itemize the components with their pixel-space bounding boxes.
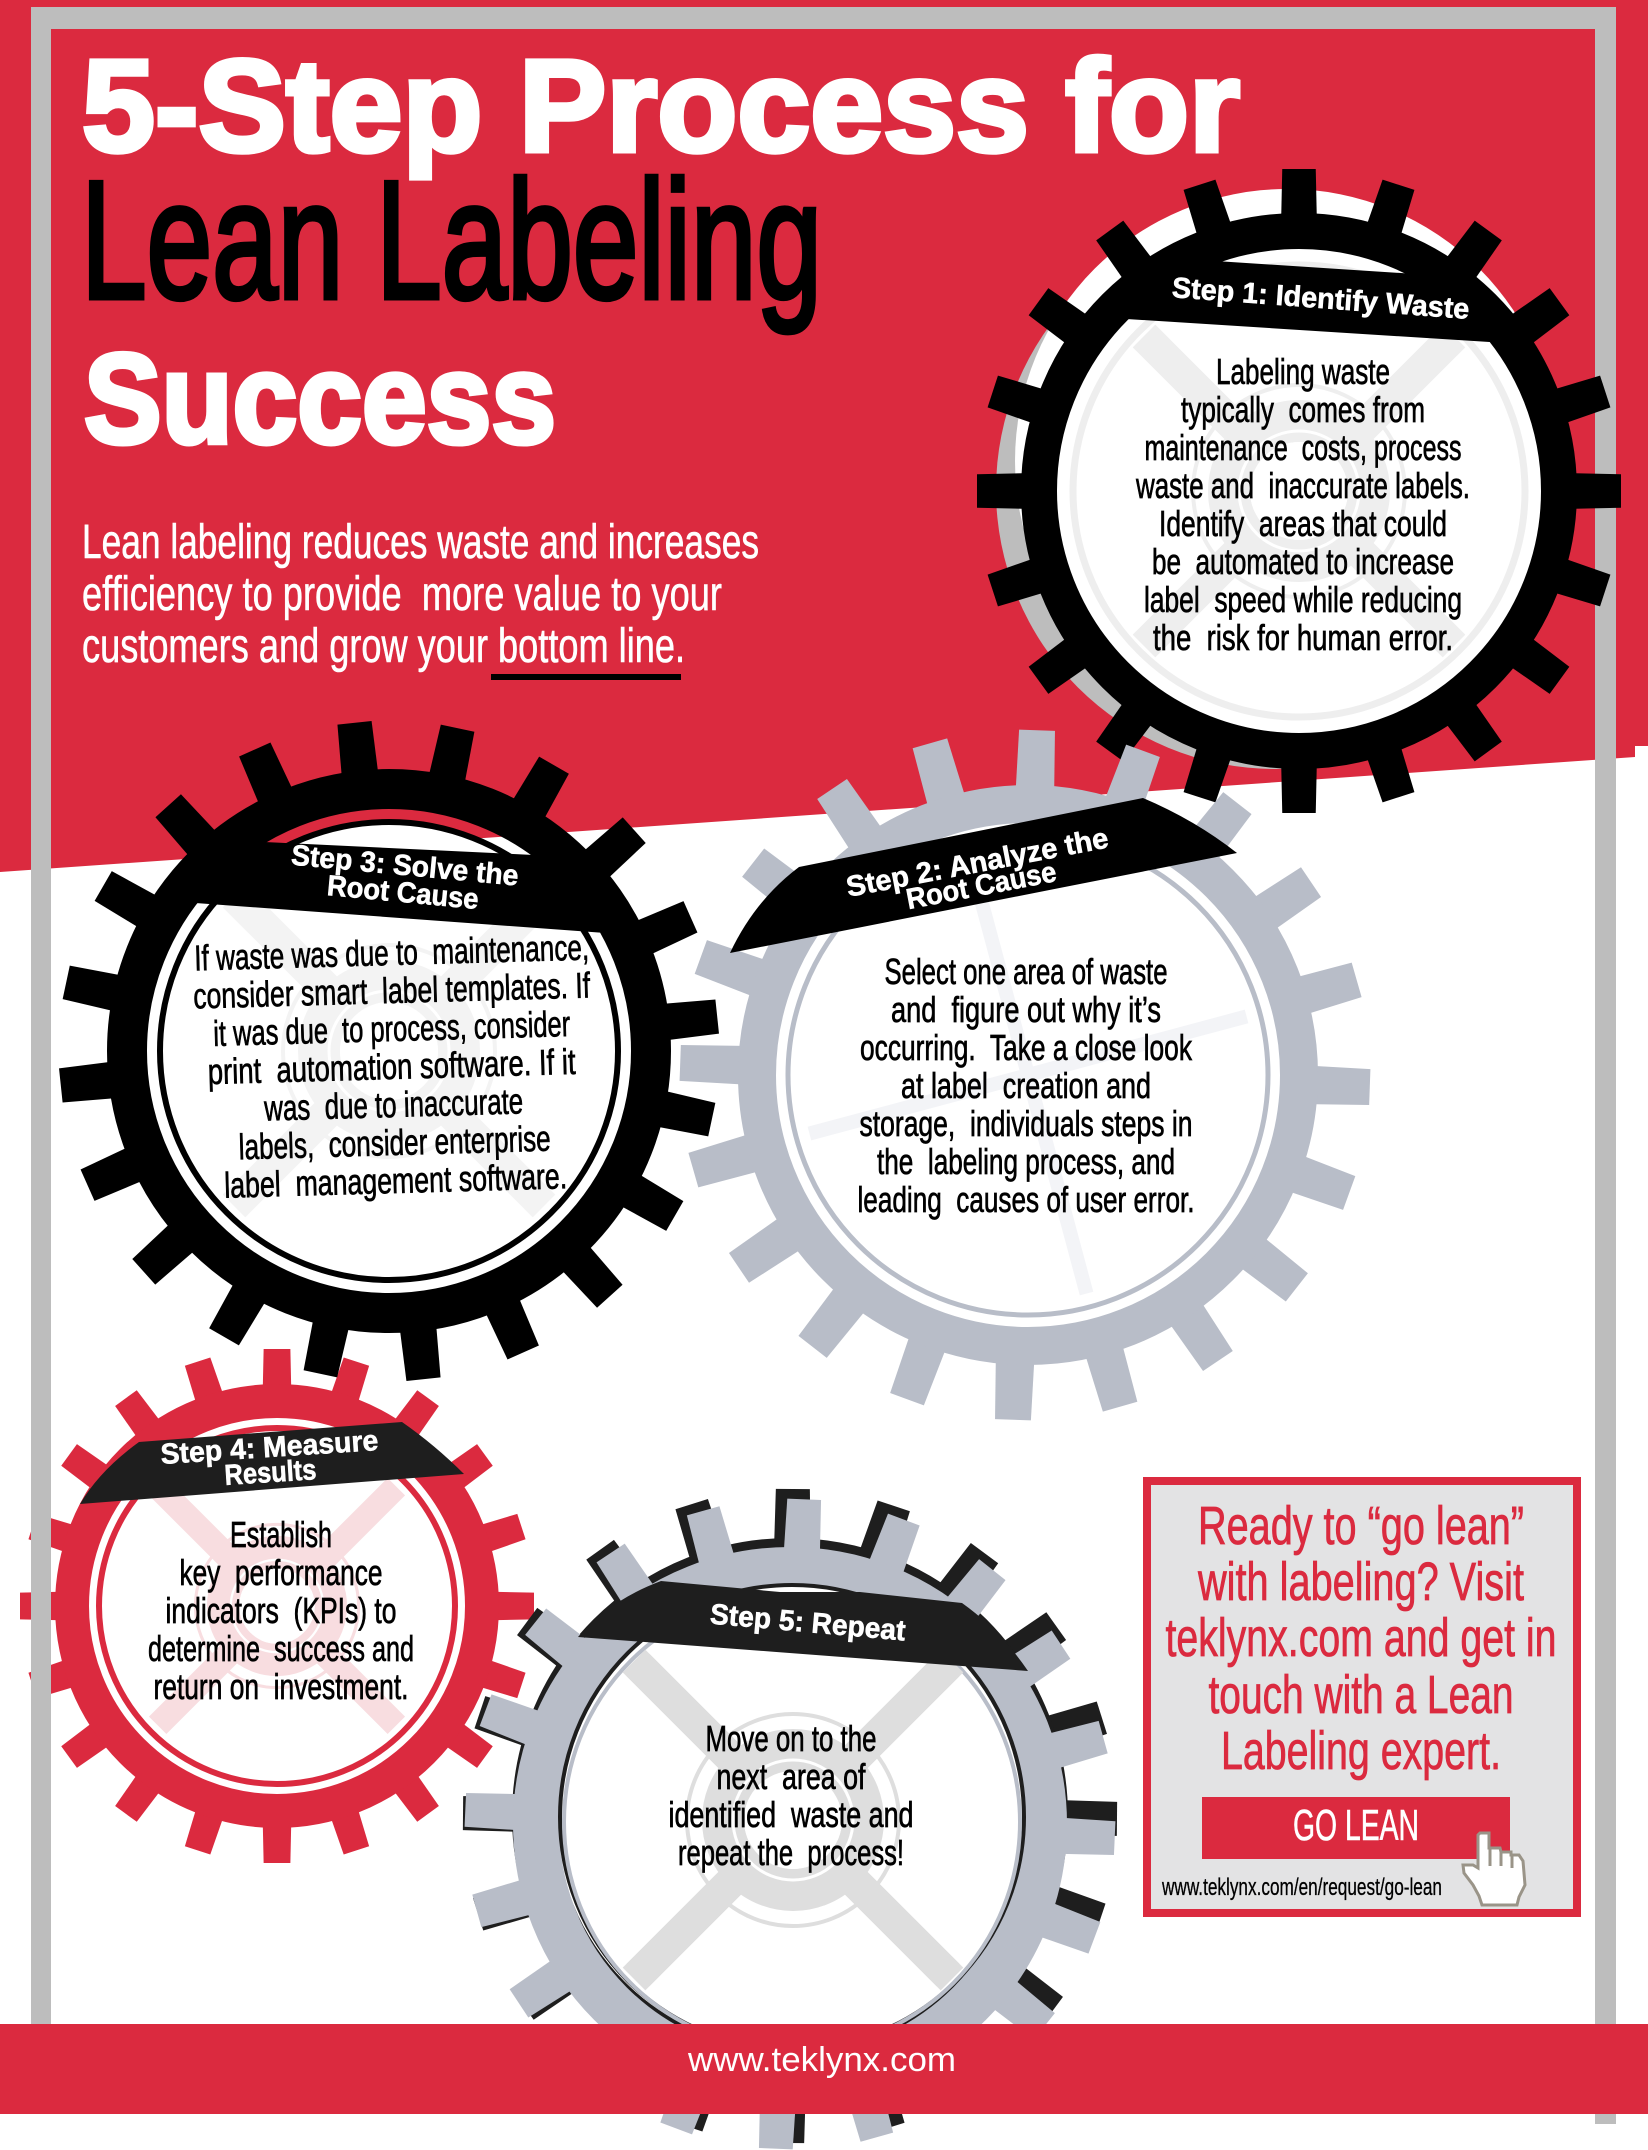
gear 4 inner disc xyxy=(99,1428,455,1784)
gear 3 text: was due to inaccurate xyxy=(263,1080,524,1129)
gear 3 heading band xyxy=(197,842,600,933)
gear 4 heading: Results xyxy=(223,1454,317,1492)
gear 3 spokes xyxy=(234,896,544,1206)
gear 1 spokes xyxy=(1144,336,1454,646)
gear 1 heading band xyxy=(1128,262,1490,342)
URL: www.teklynx.com/en/request/go-lean xyxy=(1161,1874,1442,1901)
gear 1 text xyxy=(1135,351,1470,658)
gear 1 text: Labeling waste xyxy=(1216,351,1390,392)
gear 3 text: labels, consider enterprise xyxy=(238,1118,551,1167)
gear 2 teeth xyxy=(668,718,1382,1432)
gear 4 text: Establish xyxy=(230,1514,332,1555)
gear 1 heading: Step 1: Identify Waste xyxy=(1171,272,1470,326)
panel: step 3 gear xyxy=(59,721,719,1381)
gear 4 text: return on investment. xyxy=(154,1666,408,1707)
gear 4 teeth xyxy=(20,1349,534,1863)
gear 5 inner grey line xyxy=(564,1594,1020,2050)
CTA box xyxy=(1147,1481,1577,1913)
gear 1 text: typically comes from xyxy=(1181,389,1425,430)
intro paragraph: customers and grow your bottom line. xyxy=(82,620,685,673)
gear 5 text: Move on to the xyxy=(706,1718,876,1759)
panel: step 5 gear xyxy=(451,1485,1129,2150)
CTA text: touch with a Lean xyxy=(1208,1665,1514,1725)
gear 2 heading: Step 2: Analyze the xyxy=(844,823,1111,904)
gear 3 heading xyxy=(290,840,520,916)
gear 3 heading: Step 3: Solve the xyxy=(290,840,520,893)
button: GO LEAN xyxy=(1293,1801,1419,1850)
gear 5 text: repeat the process! xyxy=(678,1832,904,1873)
gear 2 text: and figure out why it’s xyxy=(891,989,1161,1030)
gear 3 text xyxy=(193,926,591,1206)
gear 2 ring xyxy=(757,804,1299,1346)
gear 3 text: print automation software. If it xyxy=(207,1041,576,1092)
gear 3 text: it was due to process, consider xyxy=(213,1003,571,1054)
panel: step 4 gear xyxy=(20,1349,534,1863)
gear 1 grey back ring xyxy=(996,211,1554,769)
footer band xyxy=(0,2024,1648,2114)
gear 1 text: be automated to increase xyxy=(1152,541,1454,582)
gear 2 text: occurring. Take a close look xyxy=(860,1027,1193,1068)
gear 1 text: maintenance costs, process xyxy=(1144,427,1462,468)
gear 4 heading xyxy=(160,1425,379,1492)
intro paragraph: Lean labeling reduces waste and increases xyxy=(82,516,759,569)
gear 4 heading: Step 4: Measure xyxy=(160,1425,379,1471)
intro paragraph xyxy=(82,516,759,673)
gear 5 dark shadow ring xyxy=(534,1560,1046,2072)
gear 2 text: storage, individuals steps in xyxy=(860,1103,1192,1144)
CTA text: Labeling expert. xyxy=(1221,1721,1501,1781)
gear 2 text: the labeling process, and xyxy=(877,1141,1175,1182)
icon: hand cursor xyxy=(1463,1833,1525,1905)
gear 2 text xyxy=(858,951,1194,1220)
gear 3 inner disc xyxy=(160,822,618,1280)
gear 4 text xyxy=(148,1514,414,1707)
gear 2 text: Select one area of waste xyxy=(884,951,1168,992)
panel: step 1 gear xyxy=(977,169,1621,813)
gear 4 heading band xyxy=(80,1422,464,1504)
underline: bottom line xyxy=(491,674,681,680)
main title: Lean Labeling xyxy=(81,146,822,334)
gear 3 heading: Root Cause xyxy=(326,870,480,916)
gear 2 spokes xyxy=(809,856,1247,1294)
CTA text: Ready to “go lean” xyxy=(1198,1496,1524,1556)
gear 4 ring xyxy=(72,1401,482,1811)
main title: Success xyxy=(84,328,556,471)
CTA text xyxy=(1166,1496,1556,1781)
gear 5 heading: Step 5: Repeat xyxy=(709,1599,907,1648)
gear 5 text: next area of xyxy=(716,1756,866,1797)
gear 5 grey teeth xyxy=(451,1485,1129,2150)
gear 5 inner disc xyxy=(560,1585,1024,2049)
gear 4 spokes xyxy=(158,1487,396,1725)
gear 2 heading band xyxy=(730,798,1237,953)
gear 3 text: consider smart label templates. If xyxy=(193,964,591,1017)
gear 5 text: identified waste and xyxy=(668,1794,914,1835)
CTA text: with labeling? Visit xyxy=(1197,1552,1524,1612)
panel: step 2 gear xyxy=(668,718,1382,1432)
gear 2 inner disc xyxy=(788,835,1268,1315)
gear 3 text: label management software. xyxy=(224,1155,568,1206)
gear 4 text: determine success and xyxy=(148,1628,414,1669)
gear 5 text xyxy=(668,1718,914,1873)
gear 5 spokes xyxy=(638,1665,948,1975)
gear 1 text: the risk for human error. xyxy=(1153,617,1453,658)
panel: call to action xyxy=(1147,1481,1577,1913)
gear 1 pale inner ring xyxy=(1073,265,1525,717)
gear 2 heading: Root Cause xyxy=(904,856,1059,916)
gear 1 ring xyxy=(1039,231,1559,751)
gear 5 dark shadow teeth xyxy=(460,1486,1120,2146)
gear 5 grey ring xyxy=(536,1570,1044,2078)
gear 2 text: at label creation and xyxy=(901,1065,1151,1106)
button xyxy=(1202,1797,1510,1859)
gear 3 text: If waste was due to maintenance, xyxy=(194,926,590,979)
gear 4 text: key performance xyxy=(180,1552,382,1593)
gear 5 spoke extensions xyxy=(634,1661,952,1979)
gear 3 teeth xyxy=(26,688,752,1414)
footer URL: www.teklynx.com xyxy=(687,2041,956,2079)
intro paragraph: efficiency to provide more value to your xyxy=(82,568,722,621)
main title: 5-Step Process for xyxy=(82,32,1240,179)
main title xyxy=(81,32,1240,471)
gear 5 heading band xyxy=(578,1581,1028,1671)
gear 4 text: indicators (KPIs) to xyxy=(166,1590,396,1631)
gear 1 text: waste and inaccurate labels. xyxy=(1135,465,1470,506)
gear 1 white back ring xyxy=(1015,189,1559,733)
gear 3 ring xyxy=(127,789,651,1313)
gear 1 text: Identify areas that could xyxy=(1159,503,1447,544)
gear 1 teeth xyxy=(977,169,1621,813)
gear 2 text: leading causes of user error. xyxy=(858,1179,1194,1220)
background: red upper area with slanted edge xyxy=(0,0,1648,872)
gear 1 text: label speed while reducing xyxy=(1144,579,1462,620)
